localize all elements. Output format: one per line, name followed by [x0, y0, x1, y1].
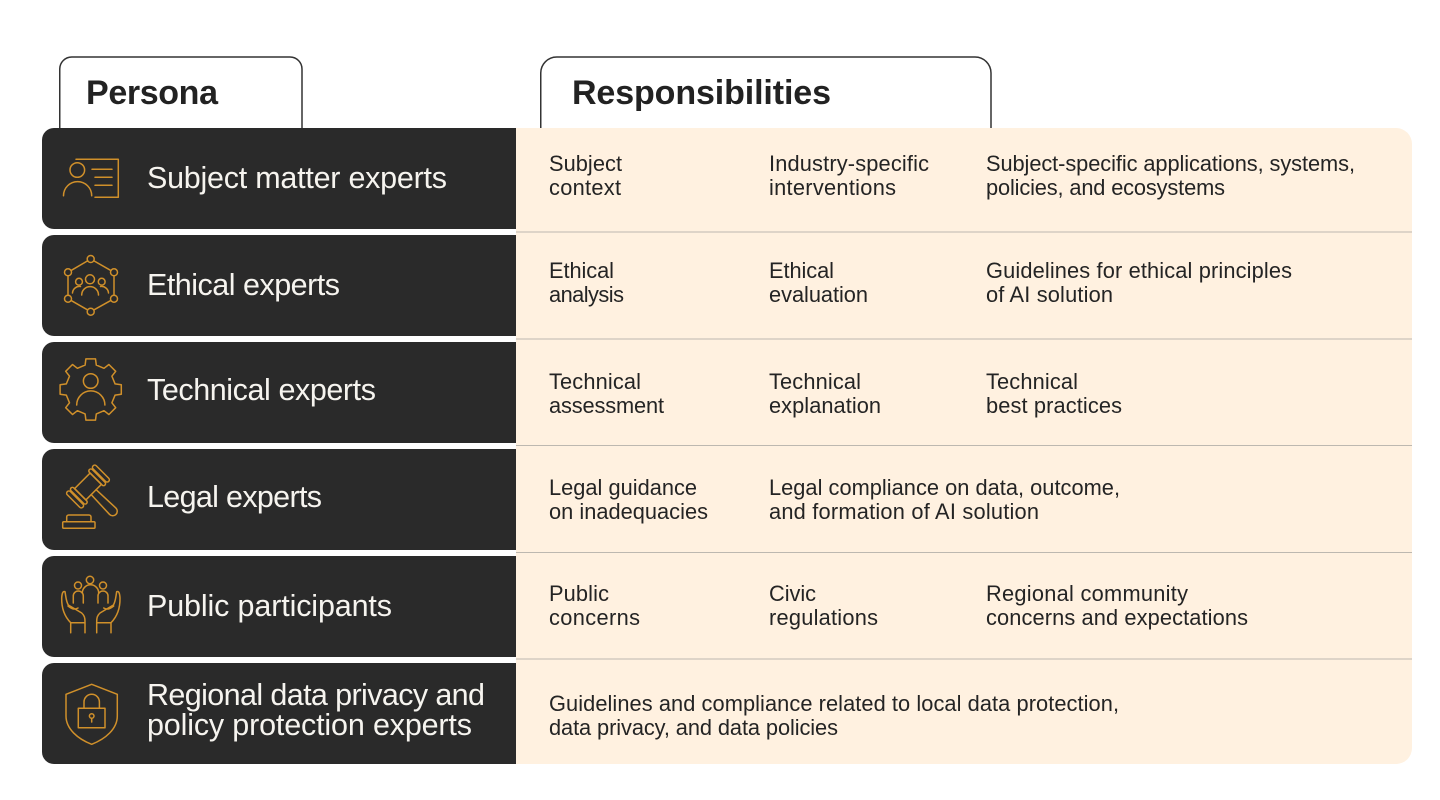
- responsibilities: Technical experts: best practices: [986, 393, 1122, 418]
- responsibilities: Technical experts: Technical: [549, 369, 641, 394]
- panel: responsibilities background: [516, 128, 1412, 764]
- responsibilities: Regional data privacy and policy protection experts: Guidelines and compliance related to local data protection,: [549, 691, 1119, 716]
- row: Regional data privacy and policy protection experts: [42, 663, 1119, 764]
- persona bar: Subject matter experts: [42, 128, 516, 229]
- tab: Persona heading: Persona: [86, 74, 219, 112]
- responsibilities: Ethical experts: of AI solution: [986, 282, 1113, 307]
- responsibilities: Subject matter experts: Subject-specific applications, systems,: [986, 151, 1355, 176]
- responsibilities: Technical experts: Technical: [986, 369, 1078, 394]
- tab: Responsibilities heading: Responsibilities: [572, 74, 831, 112]
- responsibilities: Public participants: regulations: [769, 605, 878, 630]
- responsibilities: Subject matter experts: interventions: [769, 175, 896, 200]
- responsibilities: Legal experts: and formation of AI solution: [769, 499, 1039, 524]
- responsibilities: Legal experts: Legal guidance: [549, 475, 697, 500]
- responsibilities: Regional data privacy and policy protection experts: [549, 691, 1119, 740]
- responsibilities: Subject matter experts: policies, and ecosystems: [986, 175, 1225, 200]
- persona bar: Regional data privacy and policy protection experts: [42, 663, 516, 764]
- icon: gavel: [63, 464, 130, 529]
- row: Subject matter experts: [42, 128, 1355, 229]
- persona bar: Legal experts: Legal experts: [147, 480, 322, 514]
- responsibilities: Technical experts: [549, 369, 1122, 418]
- responsibilities: Public participants: Regional community: [986, 581, 1188, 606]
- responsibilities: Ethical experts: analysis: [549, 282, 624, 307]
- responsibilities: Public participants: Public: [549, 581, 609, 606]
- persona bar: Subject matter experts: Subject matter experts: [147, 161, 447, 195]
- tab: Responsibilities heading: [541, 57, 991, 128]
- persona bar: Technical experts: [42, 342, 516, 443]
- responsibilities: Subject matter experts: Industry-specific: [769, 151, 929, 176]
- row: Public participants: [42, 556, 1248, 657]
- responsibilities: Ethical experts: [549, 258, 1292, 307]
- icon: gear with person: [60, 359, 121, 420]
- persona bar: Regional data privacy and policy protection experts: policy protection experts: [147, 708, 472, 742]
- responsibilities: Technical experts: explanation: [769, 393, 881, 418]
- persona bar: Public participants: [42, 556, 516, 657]
- responsibilities: Ethical experts: Ethical: [549, 258, 614, 283]
- responsibilities: Subject matter experts: Subject: [549, 151, 622, 176]
- responsibilities: Legal experts: [549, 475, 1120, 524]
- icon: hands holding people: [62, 576, 120, 633]
- responsibilities: Public participants: concerns and expectations: [986, 605, 1248, 630]
- responsibilities: Regional data privacy and policy protection experts: data privacy, and data policies: [549, 715, 838, 740]
- responsibilities: Public participants: [549, 581, 1248, 630]
- responsibilities: Subject matter experts: context: [549, 175, 621, 200]
- persona bar: Ethical experts: [42, 235, 516, 336]
- row: Legal experts: [42, 449, 1120, 550]
- persona bar: Ethical experts: Ethical experts: [147, 268, 340, 302]
- responsibilities: Ethical experts: evaluation: [769, 282, 868, 307]
- responsibilities: Legal experts: Legal compliance on data, outcome,: [769, 475, 1120, 500]
- responsibilities: Legal experts: on inadequacies: [549, 499, 708, 524]
- responsibilities: Public participants: Civic: [769, 581, 816, 606]
- responsibilities: Public participants: concerns: [549, 605, 640, 630]
- icon: hexagon network of people: [64, 256, 118, 315]
- tab: Persona heading: [60, 57, 302, 128]
- icon: shield with padlock: [66, 684, 117, 744]
- responsibilities: Ethical experts: Guidelines for ethical principles: [986, 258, 1292, 283]
- icon: person with document: [64, 159, 118, 197]
- responsibilities: Ethical experts: Ethical: [769, 258, 834, 283]
- responsibilities: Subject matter experts: [549, 151, 1355, 200]
- responsibilities: Technical experts: assessment: [549, 393, 664, 418]
- responsibilities: Technical experts: Technical: [769, 369, 861, 394]
- persona bar: Technical experts: Technical experts: [147, 373, 376, 407]
- persona bar: Legal experts: [42, 449, 516, 550]
- row: Technical experts: [42, 342, 1122, 443]
- persona bar: Regional data privacy and policy protection experts: Regional data privacy and: [147, 678, 485, 712]
- persona bar: Public participants: Public participants: [147, 589, 392, 623]
- row: Ethical experts: [42, 235, 1292, 336]
